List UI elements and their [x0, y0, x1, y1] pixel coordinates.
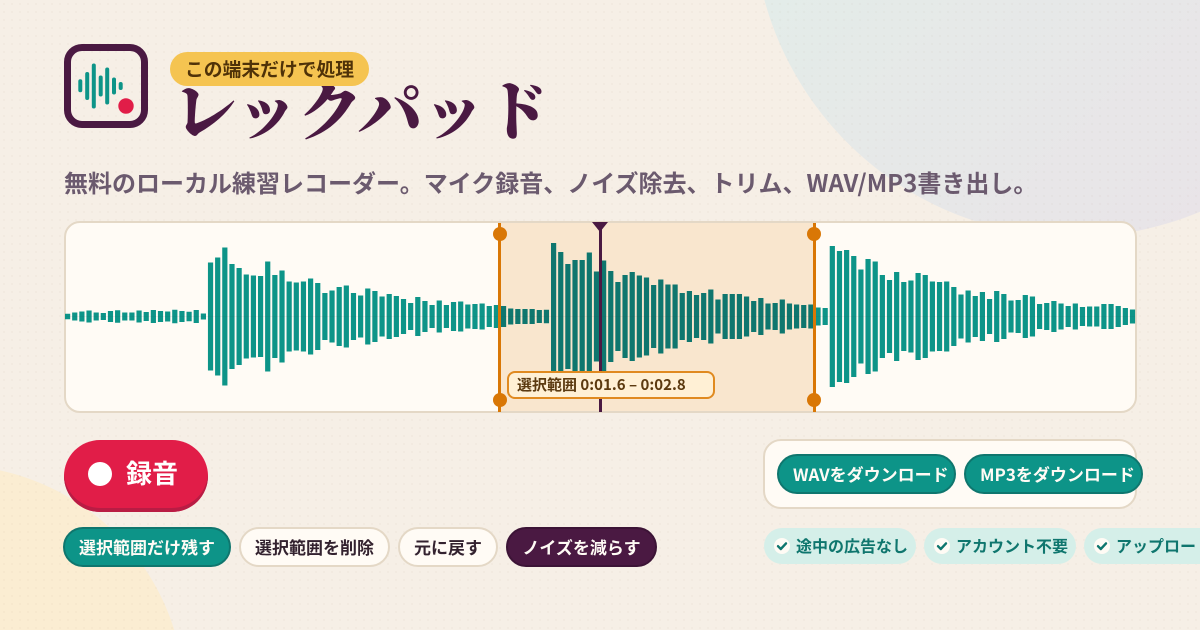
feature pill: no account: アカウント不要: [956, 533, 1068, 557]
feature pill: no upload: [1084, 528, 1200, 564]
panel: waveform editor: [64, 221, 1137, 413]
subtitle: 無料のローカル練習レコーダー。マイク録音、ノイズ除去、トリム、WAV/MP3書き出し。: [64, 164, 1037, 199]
selection start handle: [493, 223, 507, 412]
icon: record dot: [88, 462, 112, 486]
panel background: [64, 221, 1137, 413]
record button: [64, 440, 208, 512]
button: MP3 download: MP3をダウンロード: [980, 460, 1135, 486]
playhead: [592, 222, 608, 412]
app icon: [64, 44, 148, 128]
button: keep selection: 選択範囲だけ残す: [79, 534, 215, 558]
button: delete selection: 選択範囲を削除: [255, 534, 374, 558]
waveform center line: [66, 316, 1135, 317]
button: MP3 download: [964, 454, 1143, 494]
selected region highlight: [500, 223, 814, 411]
badge: on-device processing: この端末だけで処理: [185, 55, 354, 82]
button: undo: 元に戻す: [414, 534, 482, 558]
button: delete selection: [239, 527, 390, 567]
selection end handle: [807, 223, 821, 412]
title: レックパッド: [172, 62, 549, 154]
button: undo: [398, 527, 498, 567]
badge: on-device processing: [170, 52, 369, 86]
feature pill: no account: [924, 528, 1076, 564]
button: WAV download: WAVをダウンロード: [793, 460, 949, 486]
button: reduce noise: ノイズを減らす: [522, 534, 641, 558]
button: keep selection: [63, 527, 231, 567]
button: reduce noise: [506, 527, 657, 567]
feature pill: no ads: [764, 528, 916, 564]
feature pill: no ads: 途中の広告なし: [796, 533, 908, 557]
selection time label: [507, 371, 715, 399]
record label: 録音: [126, 454, 178, 491]
button: WAV download: [777, 454, 956, 494]
waveform bars: [65, 243, 1136, 387]
panel: download: [763, 439, 1137, 509]
selection time label: 選択範囲 0:01.6 – 0:02.8: [517, 374, 686, 395]
